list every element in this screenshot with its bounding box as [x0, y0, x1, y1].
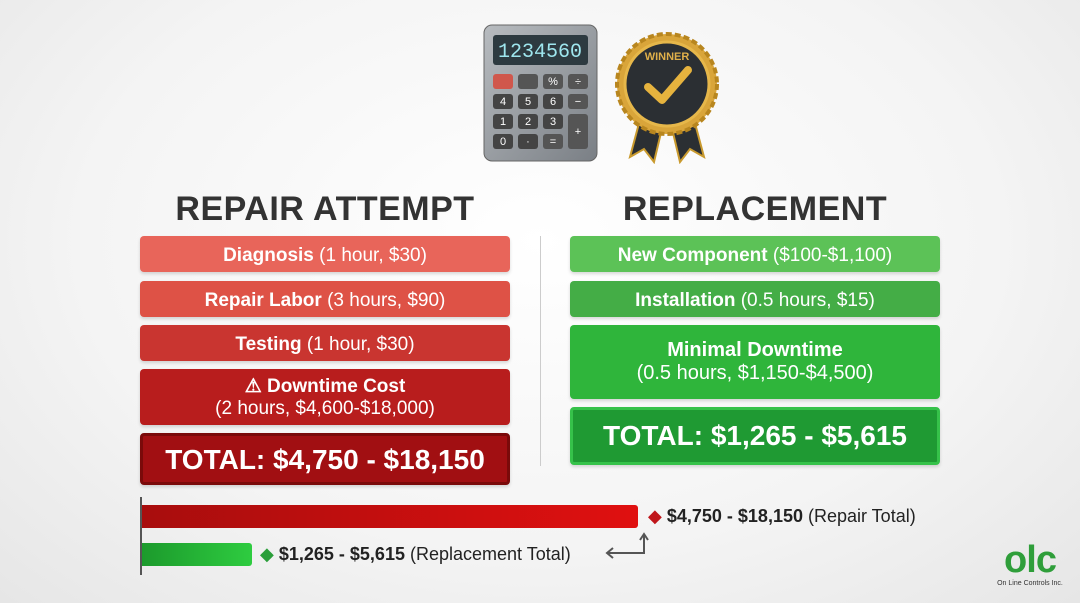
icon: calculator: % [548, 76, 558, 88]
box: testing [140, 325, 510, 361]
logo: OLC: On Line Controls Inc. [997, 580, 1063, 587]
label: replacement total: ◆ $1,265 - $5,615 (Replacement Total) [260, 544, 571, 564]
box: minimal downtime: Minimal Downtime [667, 339, 843, 361]
icon: calculator: 4 [500, 96, 506, 108]
box: repair labor: Repair Labor (3 hours, $90) [205, 290, 445, 311]
icon: calculator: 1234560 [498, 41, 582, 64]
box: diagnosis [140, 236, 510, 272]
icon: calculator [484, 24, 598, 162]
box: new component [570, 236, 940, 272]
icon: winner badge [615, 32, 719, 164]
icon: calculator: 6 [550, 96, 556, 108]
box: installation [570, 281, 940, 317]
bar: replacement [142, 543, 252, 566]
icon: calculator: 3 [550, 116, 556, 128]
box: replacement total: TOTAL: $1,265 - $5,615 [603, 420, 907, 451]
icon: calculator: 5 [525, 96, 531, 108]
box: downtime cost [140, 369, 510, 425]
box: repair labor [140, 281, 510, 317]
box: repair total [140, 433, 510, 485]
box: replacement total [570, 407, 940, 465]
icon: calculator: 0 [500, 136, 506, 148]
box: installation: Installation (0.5 hours, $15) [635, 290, 875, 311]
arrow [606, 532, 649, 559]
heading: replacement: REPLACEMENT [623, 190, 887, 228]
icon: calculator: + [575, 126, 581, 138]
box: minimal downtime: (0.5 hours, $1,150-$4,500) [637, 362, 873, 384]
box: downtime cost: (2 hours, $4,600-$18,000) [215, 398, 435, 419]
bar: repair [142, 505, 638, 528]
icon: calculator: − [575, 96, 581, 108]
panel: replacement column [569, 236, 941, 468]
icon: calculator: ÷ [575, 76, 581, 88]
bar chart: totals comparison [140, 497, 916, 575]
box: minimal downtime [570, 325, 940, 399]
logo: OLC [997, 539, 1063, 587]
box: downtime cost: ⚠ Downtime Cost [245, 376, 405, 397]
icon: calculator: 1 [500, 116, 506, 128]
icon: calculator: 2 [525, 116, 531, 128]
icon: calculator: = [550, 136, 556, 148]
icon: winner badge: WINNER [645, 51, 689, 63]
label: repair total: ◆ $4,750 - $18,150 (Repair Total) [648, 506, 916, 526]
logo: OLC: olc [1004, 539, 1056, 581]
box: diagnosis: Diagnosis (1 hour, $30) [223, 245, 427, 266]
box: new component: New Component ($100-$1,100) [618, 245, 892, 266]
heading: repair attempt: REPAIR ATTEMPT [175, 190, 475, 228]
box: repair total: TOTAL: $4,750 - $18,150 [165, 444, 485, 475]
box: testing: Testing (1 hour, $30) [235, 334, 415, 355]
panel: repair column [139, 236, 511, 488]
divider [540, 236, 541, 466]
icon: calculator: · [526, 136, 530, 148]
